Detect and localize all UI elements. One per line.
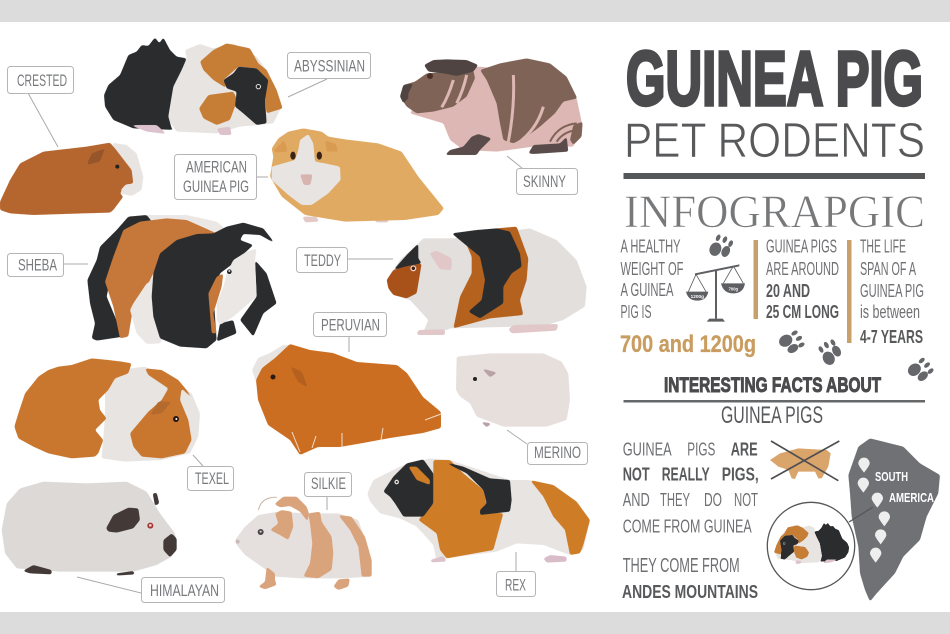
text block: life span: THE LIFE	[860, 237, 906, 257]
label: Skinny	[507, 156, 578, 194]
label: Peruvian	[314, 312, 386, 352]
text block: length: GUINEA PIGS	[766, 237, 837, 257]
icon: balance scale	[686, 264, 745, 322]
text block: not really pigs: PIGS,	[722, 465, 759, 485]
text block: length: ARE AROUND	[766, 259, 839, 279]
text block: not really pigs: THEY	[660, 490, 690, 510]
label: Texel: TEXEL	[195, 469, 229, 488]
section rule	[624, 400, 925, 402]
illustration: Abyssinian guinea pig	[104, 37, 283, 135]
text block: life span: is between	[860, 302, 920, 322]
illustration: Rex guinea pig	[367, 458, 590, 563]
text block: not really pigs: NOT	[734, 490, 758, 510]
illustration: Skinny guinea pig	[400, 58, 583, 155]
icon: crossed-out pig	[770, 441, 839, 481]
label: Teddy	[296, 248, 393, 272]
label: Crested: CRESTED	[17, 71, 67, 90]
heading: Guinea pigs: GUINEA PIGS	[721, 402, 823, 429]
illustration: Sheba guinea pig	[87, 215, 277, 348]
label: Sheba	[8, 254, 88, 276]
stat: 700 and 1200g: 700 and 1200g	[620, 331, 756, 358]
icon: balance scale: 1200g	[691, 294, 704, 299]
text block: not really pigs: GUINEA	[623, 440, 672, 460]
heading: Infograpgic: INFOGRAPGIC	[624, 186, 925, 238]
label: Silkie: SILKIE	[311, 474, 346, 493]
label: Texel	[188, 455, 234, 490]
text block: not really pigs: AND	[623, 490, 650, 510]
label: Himalayan	[77, 577, 224, 602]
illustration: Himalayan guinea pig	[2, 482, 177, 576]
callout: circle with guinea pig pointing to map	[767, 502, 873, 590]
label: Silkie	[304, 472, 352, 510]
label: Crested	[8, 66, 74, 147]
label: American guinea pig: GUINEA PIG	[183, 177, 249, 196]
text block: length: 25 CM LONG	[766, 302, 839, 322]
label: Abyssinian	[288, 52, 370, 97]
text block: not really pigs: REALLY	[662, 465, 710, 485]
icon: paw print 2	[777, 328, 807, 357]
text block: length	[766, 237, 839, 322]
text block: Andes Mountains	[622, 555, 758, 602]
illustration: Texel guinea pig	[14, 358, 200, 462]
icon: paw print 4	[905, 355, 936, 385]
label: Merino	[507, 430, 588, 464]
icon: balance scale: 700g	[729, 287, 738, 292]
illustration: American guinea pig	[270, 128, 444, 222]
text block: not really pigs: COME FROM GUINEA	[623, 517, 752, 537]
divider: first column	[754, 240, 758, 319]
text block: length: 20 AND	[766, 281, 810, 301]
text block: not really pigs: PIGS	[687, 440, 715, 460]
label: Merino: MERINO	[534, 443, 581, 462]
label: Rex	[496, 552, 536, 596]
text block: not really pigs: ARE	[731, 440, 758, 460]
icon: paw print 1	[707, 232, 735, 262]
map label: South America: SOUTH	[875, 469, 908, 484]
text block: not really pigs: NOT	[623, 465, 650, 485]
label: American guinea pig: AMERICAN	[186, 158, 247, 177]
text block: Andes Mountains: ANDES MOUNTAINS	[622, 582, 758, 602]
text block: healthy weight	[620, 237, 684, 322]
illustration: Teddy guinea pig	[387, 227, 587, 335]
text block: not really pigs	[623, 440, 759, 537]
illustration: Merino guinea pig	[456, 353, 570, 427]
text block: healthy weight: PIG IS	[620, 302, 652, 322]
text block: life span: 4-7 YEARS	[860, 327, 923, 347]
label: Himalayan: HIMALAYAN	[150, 581, 219, 600]
text block: not really pigs: DO	[704, 490, 722, 510]
text block: life span	[860, 237, 924, 347]
illustration: Peruvian guinea pig	[252, 344, 441, 455]
text block: healthy weight: A HEALTHY	[620, 237, 680, 257]
map label: South America	[875, 469, 934, 505]
label: Abyssinian: ABYSSINIAN	[294, 57, 365, 76]
illustration: Crested guinea pig	[0, 143, 143, 215]
label: Teddy: TEDDY	[304, 251, 341, 270]
label: Skinny: SKINNY	[523, 172, 566, 191]
text block: healthy weight: WEIGHT OF	[620, 259, 684, 279]
text block: healthy weight: A GUINEA	[620, 280, 674, 300]
label: Peruvian: PERUVIAN	[321, 316, 380, 335]
heading divider bar	[624, 173, 925, 179]
map: South America	[848, 438, 940, 602]
icon: paw print 3	[816, 337, 845, 367]
illustration: Silkie guinea pig	[235, 497, 372, 590]
label: Sheba: SHEBA	[18, 256, 57, 275]
label: Rex: REX	[505, 576, 526, 595]
label: American guinea pig	[174, 154, 268, 200]
map label: South America: AMERICA	[889, 490, 934, 505]
divider: second column	[847, 240, 852, 343]
text block: Andes Mountains: THEY COME FROM	[623, 555, 740, 577]
